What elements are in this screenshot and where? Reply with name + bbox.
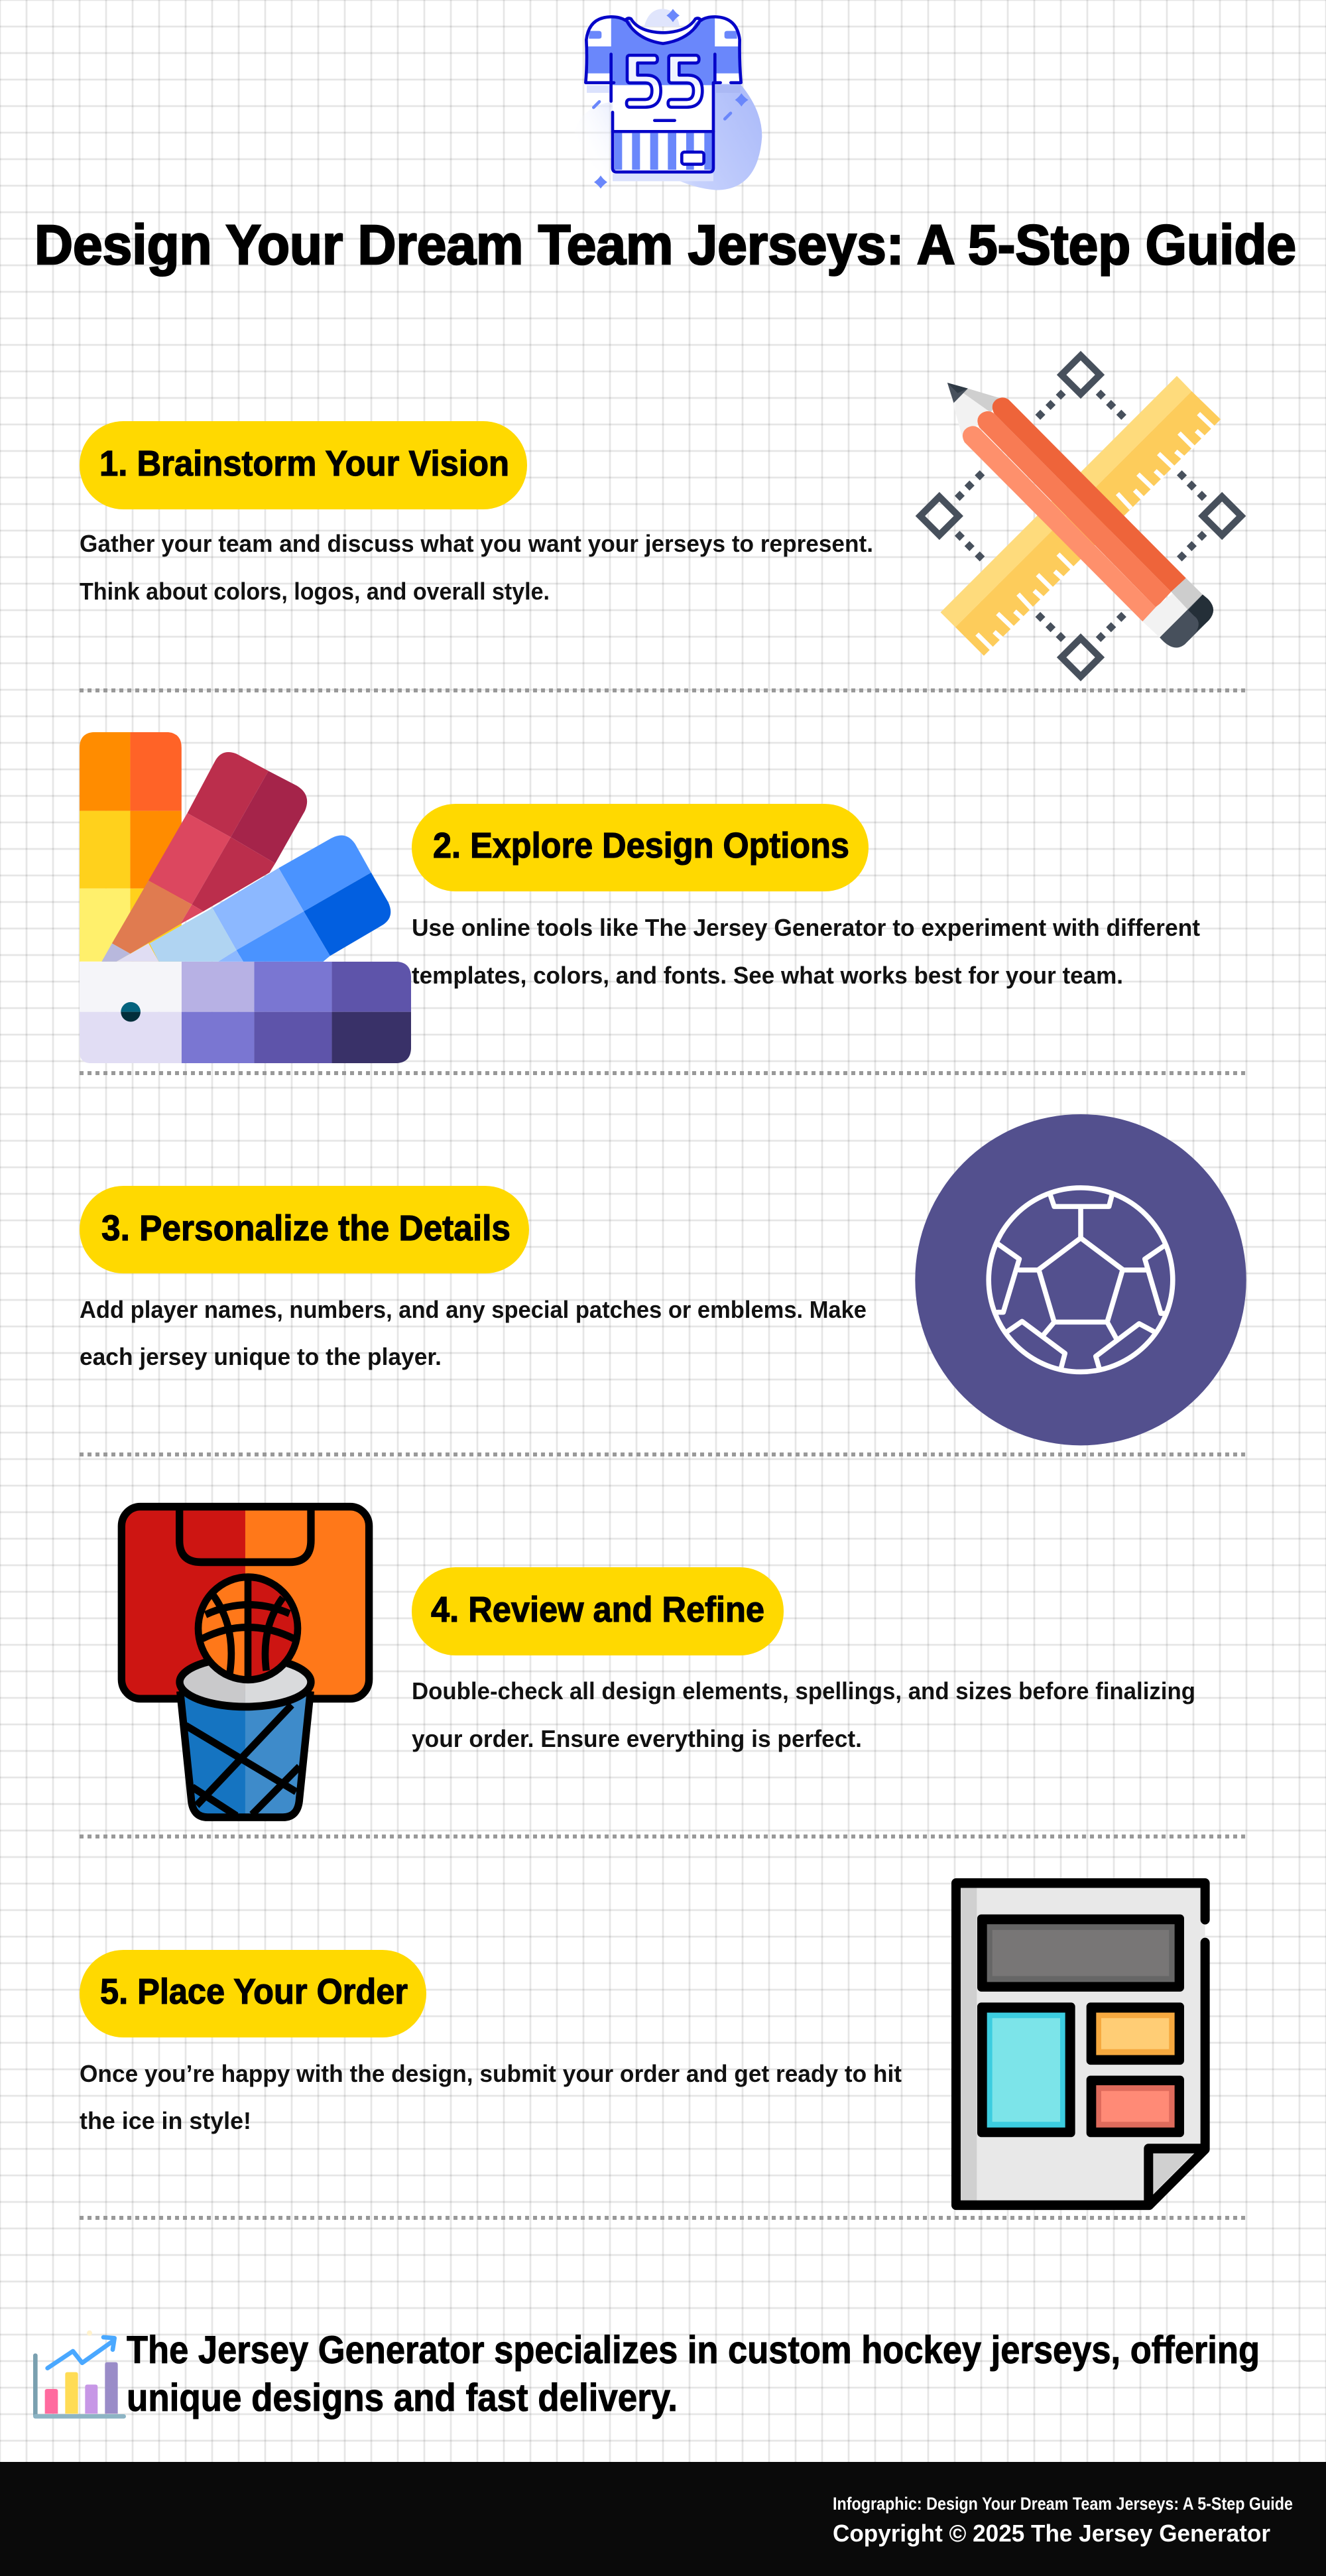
icon: rising bar chart [35, 2331, 124, 2416]
body text 3: Add player names, numbers, and any special patches or emblems. Make [80, 1296, 867, 1323]
heading pill 2 [412, 804, 869, 891]
heading pill 5: 5. Place Your Order [100, 1972, 408, 2012]
panel: step 4 review [121, 1507, 1195, 1817]
heading pill 5 [80, 1950, 426, 2037]
body text 2: Use online tools like The Jersey Generator to experiment with different [412, 914, 1200, 941]
heading pill 1: 1. Brainstorm Your Vision [99, 444, 509, 483]
heading pill 1 [80, 421, 527, 509]
panel: step 3 personalize [80, 1114, 1246, 1445]
body text 1: Gather your team and discuss what you want your jerseys to represent. [80, 530, 873, 557]
footer text: Copyright © 2025 The Jersey Generator [833, 2520, 1270, 2547]
footer bar [0, 2462, 1326, 2576]
body text 2: templates, colors, and fonts. See what works best for your team. [412, 962, 1123, 989]
panel: step 5 order [80, 1883, 1205, 2205]
icon: basketball hoop [121, 1507, 369, 1817]
heading pill 3 [80, 1186, 529, 1273]
heading pill 4: 4. Review and Refine [431, 1590, 764, 1630]
icon: pencil and ruler [916, 351, 1246, 681]
body text 4: Double-check all design elements, spellings, and sizes before finalizing [412, 1677, 1195, 1705]
body text 1: Think about colors, logos, and overall style. [80, 578, 550, 605]
title: Design Your Dream Team Jerseys: A 5-Step Guide [34, 214, 1296, 276]
callout: company statement [35, 2329, 1260, 2419]
callout text: unique designs and fast delivery. [127, 2376, 678, 2419]
panel: step 2 explore [80, 732, 1200, 1063]
icon: document layout page [956, 1883, 1205, 2205]
body text 5 [80, 2060, 902, 2134]
icon: colour swatch fan [80, 732, 411, 1063]
body text 3: each jersey unique to the player. [80, 1343, 442, 1370]
heading pill 3: 3. Personalize the Details [101, 1208, 511, 1248]
heading pill 2: 2. Explore Design Options [433, 826, 849, 866]
body text 4 [412, 1677, 1195, 1752]
callout text [127, 2329, 1260, 2419]
body text 2 [412, 914, 1200, 989]
body text 4: your order. Ensure everything is perfect. [412, 1725, 862, 1752]
footer text [833, 2494, 1293, 2547]
panel: step 1 brainstorm [80, 351, 1246, 681]
heading pill 4 [412, 1567, 784, 1655]
icon: jersey number 55 [575, 9, 762, 190]
body text 1 [80, 530, 873, 605]
body text 5: Once you’re happy with the design, submit your order and get ready to hit [80, 2060, 902, 2087]
body text 5: the ice in style! [80, 2107, 251, 2134]
body text 3 [80, 1296, 867, 1370]
icon: soccer ball in circle [915, 1114, 1246, 1445]
